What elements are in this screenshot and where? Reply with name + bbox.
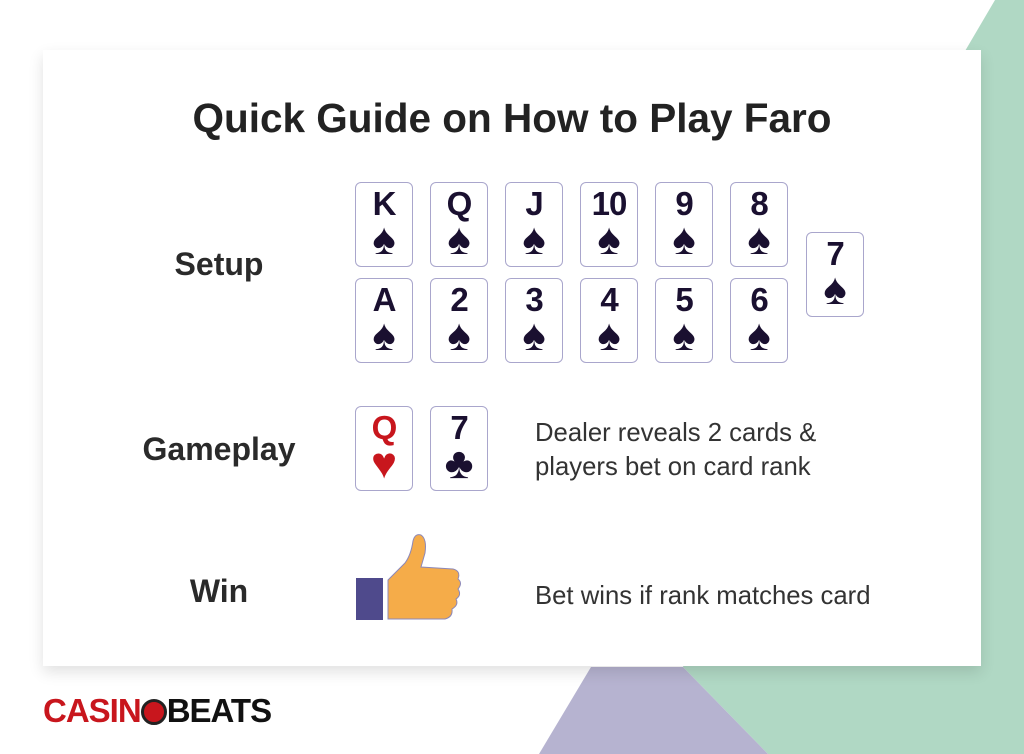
gameplay text: Dealer reveals 2 cards & bbox=[535, 419, 816, 447]
label: Win: Win bbox=[190, 573, 248, 609]
setup cards: 10 bbox=[592, 185, 626, 222]
gameplay text bbox=[535, 419, 816, 481]
setup cards bbox=[355, 182, 864, 363]
setup cards: ♠ bbox=[372, 215, 396, 264]
setup cards: 7 bbox=[826, 235, 844, 272]
setup cards: ♠ bbox=[747, 215, 771, 264]
setup cards: 4 bbox=[600, 281, 618, 318]
setup cards: ♠ bbox=[522, 311, 546, 360]
setup cards: ♠ bbox=[372, 311, 396, 360]
gameplay cards: ♥ bbox=[371, 439, 397, 488]
setup cards: ♠ bbox=[447, 311, 471, 360]
setup cards: Q bbox=[447, 185, 471, 222]
setup cards: 8 bbox=[750, 185, 768, 222]
setup cards: ♠ bbox=[597, 215, 621, 264]
gameplay cards: 7 bbox=[450, 409, 468, 446]
gameplay cards: Q bbox=[372, 409, 396, 446]
setup cards: K bbox=[373, 185, 395, 222]
gameplay text: players bet on card rank bbox=[535, 453, 811, 481]
setup cards: J bbox=[525, 185, 543, 222]
setup cards: ♠ bbox=[672, 215, 696, 264]
icon: thumbs up bbox=[356, 534, 461, 620]
win text: Bet wins if rank matches card bbox=[535, 582, 870, 610]
label: Setup: Setup bbox=[175, 246, 263, 282]
setup cards: ♠ bbox=[447, 215, 471, 264]
gameplay cards bbox=[355, 406, 488, 491]
setup cards: A bbox=[373, 281, 395, 318]
gameplay cards: ♣ bbox=[445, 439, 473, 488]
setup cards: 5 bbox=[675, 281, 693, 318]
setup cards: ♠ bbox=[597, 311, 621, 360]
setup cards: ♠ bbox=[823, 265, 847, 314]
setup cards: ♠ bbox=[747, 311, 771, 360]
main panel bbox=[43, 50, 981, 666]
setup cards: 9 bbox=[675, 185, 693, 222]
setup cards: 3 bbox=[525, 281, 543, 318]
title: Quick Guide on How to Play Faro bbox=[192, 95, 832, 141]
setup cards: ♠ bbox=[672, 311, 696, 360]
logo: CASIN BEATS bbox=[43, 692, 271, 729]
setup cards: 2 bbox=[450, 281, 468, 318]
label: Gameplay: Gameplay bbox=[143, 431, 295, 467]
setup cards: ♠ bbox=[522, 215, 546, 264]
setup cards: 6 bbox=[750, 281, 768, 318]
